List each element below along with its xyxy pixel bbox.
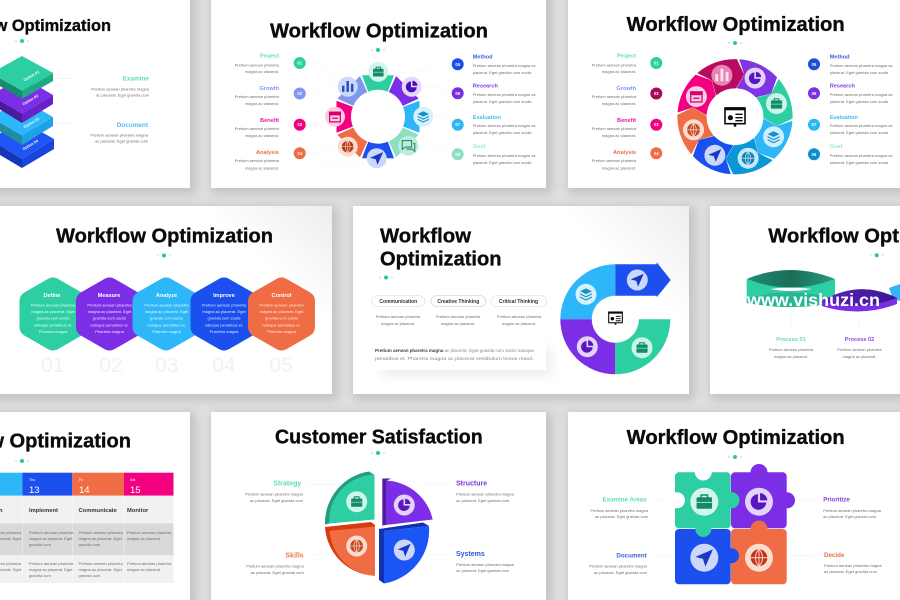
panel: segmented ring slide: [211, 0, 546, 188]
hexagon: Define: magna ac placerat. Eget: [31, 309, 76, 314]
title dots: [379, 276, 393, 280]
right number badges: [808, 58, 820, 160]
pie: strategy slice: [325, 472, 374, 524]
left labels: Pretium aenean pharetra: [592, 94, 637, 99]
left labels: magna ac placerat.: [602, 133, 636, 138]
text: Process 02: Pretium aenean pharetra: [837, 347, 882, 352]
right labels: placerat. Eget gravida cum sociis: [473, 99, 531, 104]
right labels: Pretium aenean pharetra magna ac: [830, 123, 893, 128]
text: Process 02: magna ac placerat.: [842, 354, 877, 359]
right number badges: 08: [812, 152, 817, 157]
right labels: placerat. Eget gravida cum sociis: [473, 130, 531, 135]
left labels: Pretium aenean pharetra: [592, 158, 637, 163]
hexagon: Measure: natoque penatibus et.: [90, 322, 129, 327]
right number badges: 08: [455, 152, 461, 157]
left labels: Analysis: [613, 150, 636, 156]
panel: hexagon steps slide: [0, 206, 332, 394]
hexagon: Control: gravida cum sociis: [265, 316, 298, 321]
right labels: Pretium aenean pharetra magna ac: [473, 63, 536, 68]
step numbers: 01: [41, 354, 64, 377]
plate labels: Option 04: [22, 139, 40, 151]
hexagon: Control: Control: [272, 293, 292, 299]
step numbers: [41, 354, 293, 377]
text: Skills: Pretium aenean pharetra magna: [246, 564, 304, 568]
left labels: magna ac placerat.: [602, 166, 636, 170]
pill: Critical Thinking: Critical Thinking: [499, 299, 538, 305]
hexagon: Define: natoque penatibus et.: [34, 322, 72, 327]
text: Strategy: Pretium aenean pharetra magna: [245, 492, 304, 496]
right labels: [473, 54, 536, 165]
title: Workflow Optimization: [627, 427, 845, 449]
left number badges: [294, 57, 306, 159]
left labels: Pretium aenean pharetra: [592, 62, 637, 68]
title dots: [728, 41, 742, 45]
note card: [372, 340, 552, 376]
hexagon: Improve: [200, 288, 248, 340]
hexagon: Control: [258, 288, 305, 340]
text: Document: ac placerat. Eget gravida cum: [594, 570, 648, 575]
table header: 14: [79, 485, 90, 496]
panel: 3D bands slide: [710, 206, 900, 394]
hexagon: Measure: gravida cum sociis: [93, 316, 126, 321]
title dots: [870, 253, 884, 257]
right number badges: 07: [455, 122, 461, 127]
table rows: magna ac placerat. Eget: [78, 536, 123, 541]
hexagon: Control: magna ac placerat. Eget: [260, 309, 304, 314]
pill: Communication: Communication: [379, 299, 417, 305]
right labels: Goal: [473, 144, 486, 150]
plate labels: Option 01: [23, 70, 40, 82]
text: Process 02: [837, 337, 882, 359]
text: Examine Areas: Pretium aenean pharetra magna: [590, 508, 649, 513]
text: Document: Pretium aenean pharetra magna: [589, 564, 648, 568]
table header: Fri: [79, 478, 83, 482]
right labels: placerat. Eget gravida cum sociis: [473, 160, 531, 165]
band: cyan: [889, 284, 900, 301]
table rows: Pretium aenean pharetra: [78, 530, 124, 535]
pie: skills slice: [325, 522, 375, 576]
right labels: placerat. Eget gravida cum sociis: [473, 70, 531, 75]
hexagon: Control: natoque penatibus et.: [262, 322, 301, 327]
table rows: Pretium aenean pharetra: [127, 561, 172, 566]
text: Document: Document: [616, 552, 647, 560]
right labels: Method: [830, 54, 850, 60]
hexagon: Analyze: Pretium aenean pharetra: [144, 302, 189, 308]
text: Systems: ac placerat. Eget gravida cum: [456, 568, 510, 573]
text: Structure: [456, 481, 515, 503]
table rows: Pretium aenean pharetra: [29, 530, 74, 535]
text: Skills: ac placerat. Eget gravida cum: [251, 570, 304, 575]
note card: Pretium aenean pharetra magna ac placerat. Eget gravida cum sociis natoque: [375, 348, 534, 353]
table rows: Implement: [29, 508, 58, 514]
hexagon: Measure: Pretium aenean pharetra: [87, 302, 132, 308]
hexagon: Analyze: gravida cum sociis: [150, 316, 183, 321]
connector lines: [306, 62, 451, 166]
left number badges: 04: [654, 151, 659, 156]
right labels: Method: [473, 54, 493, 60]
text: Structure: Pretium aenean pharetra magna: [456, 492, 515, 496]
right labels: Evaluation: [830, 115, 859, 121]
plate labels: Option 02: [22, 94, 39, 106]
table rows: gravida cum: [78, 542, 101, 547]
plate labels: Option 03: [23, 117, 40, 129]
table rows: gravida cum: [29, 542, 51, 547]
pie: systems slice: [379, 522, 429, 584]
text: Prioritize: Pretium aenean pharetra magna: [823, 508, 882, 513]
right labels: Pretium aenean pharetra magna ac: [473, 153, 536, 158]
text: Document: Pretium aenean pharetra magna: [90, 132, 149, 138]
panel: Customer Satisfaction slide: [211, 412, 546, 600]
text: Document: Document: [117, 122, 149, 129]
right number badges: 05: [455, 62, 461, 67]
hexagon: Define: [30, 288, 76, 340]
text: Strategy: ac placerat. Eget gravida cum: [250, 498, 304, 503]
hexagon: Measure: Pharetra magna: [95, 329, 125, 334]
text: Process 01: Pretium aenean pharetra: [769, 347, 814, 352]
text: Examine Areas: Examine Areas: [603, 496, 647, 504]
band: green: [747, 270, 835, 307]
hexagon: Improve: Improve: [213, 293, 235, 299]
title dots: [371, 451, 385, 455]
left labels: Project: [260, 54, 279, 60]
text: Document: [90, 122, 149, 144]
left labels: [235, 54, 280, 170]
pill: Communication: magna ac placerat.: [381, 321, 415, 326]
left labels: Pretium aenean pharetra: [592, 126, 637, 131]
text: Systems: Systems: [456, 551, 485, 558]
title: Optimization: [380, 249, 502, 271]
hexagon: Define: Define: [43, 293, 61, 299]
table rows: Pretium aenean pharetra: [127, 530, 172, 535]
table header: Thu: [29, 478, 35, 482]
left labels: Growth: [616, 86, 637, 92]
text: Prioritize: [823, 496, 882, 519]
right labels: [830, 54, 893, 165]
title dots: [15, 459, 29, 463]
title: Workflow Optimization: [270, 20, 488, 42]
watermark: www.vishuzi.cn: [746, 290, 880, 310]
puzzle icons: [690, 488, 773, 572]
title dots: [371, 48, 385, 52]
title: Workflow: [380, 226, 471, 248]
text: Strategy: [245, 481, 304, 503]
left labels: Pretium aenean pharetra: [235, 158, 280, 163]
text: Process 01: magna ac placerat.: [774, 354, 808, 359]
right labels: Goal: [830, 144, 843, 150]
text: Examine: Examine: [123, 76, 149, 82]
right number badges: 06: [455, 91, 461, 96]
table rows: magna ac placerat. Eget: [29, 536, 73, 541]
puzzle: blue piece: [675, 529, 739, 584]
left labels: Pretium aenean pharetra: [235, 94, 280, 99]
title: Customer Satisfaction: [275, 426, 483, 448]
C arrow chart: [560, 262, 671, 374]
left labels: Pretium aenean pharetra: [235, 62, 280, 68]
right labels: Pretium aenean pharetra magna ac: [830, 92, 893, 97]
left labels: magna ac placerat.: [245, 166, 279, 170]
left number badges: 01: [297, 60, 303, 66]
arrow ring icons: [683, 65, 787, 169]
pie: structure slice: [382, 478, 433, 526]
text: Systems: Pretium aenean pharetra magna: [456, 562, 515, 567]
hexagon: Define: Pharetra magna: [39, 329, 68, 334]
left number badges: 02: [654, 91, 659, 96]
panel: schedule table slide: [0, 412, 190, 600]
ring segments: [336, 75, 420, 158]
pill: Critical Thinking: magna ac placerat.: [502, 321, 536, 326]
right labels: Pretium aenean pharetra magna ac: [830, 63, 893, 68]
step numbers: 03: [155, 354, 178, 377]
hexagon: Analyze: [142, 288, 190, 340]
text: Examine Areas: [590, 496, 649, 519]
text: Process 01: [769, 337, 814, 359]
hexagon: Improve: magna ac placerat. Eget: [202, 309, 247, 314]
left labels: magna ac placerat.: [245, 69, 279, 74]
text: Decide: [824, 552, 882, 574]
text: Document: ac placerat. Eget gravida cum: [95, 138, 149, 144]
left number badges: [650, 57, 662, 159]
hexagon: Control: Pharetra magna: [267, 329, 297, 334]
hexagon: Improve: natoque penatibus et.: [205, 322, 243, 327]
table header: Sat: [130, 478, 135, 482]
plate labels: [22, 70, 40, 151]
right number badges: 06: [812, 91, 817, 96]
step numbers: 05: [269, 354, 293, 377]
text: Structure: Structure: [456, 481, 487, 488]
left labels: magna ac placerat.: [245, 101, 279, 106]
right labels: placerat. Eget gravida cum sociis: [830, 160, 888, 165]
table rows: Pretium aenean pharetra: [78, 561, 124, 566]
table rows: Communicate: [78, 508, 118, 514]
pill: Communication: Pretium aenean pharetra: [376, 314, 421, 319]
panel: arrow ring slide: [568, 0, 900, 188]
text: Prioritize: Prioritize: [823, 496, 850, 504]
text: Examine Areas: ac placerat. Eget gravida cum: [595, 514, 649, 519]
title: Workflow Optimization: [56, 226, 273, 248]
puzzle: green piece: [669, 464, 740, 537]
text: Decide: Decide: [824, 552, 845, 559]
connector lines: [54, 78, 73, 123]
text: Process 01: Process 01: [776, 337, 806, 343]
hexagon: Analyze: Pharetra magna: [152, 329, 182, 334]
right labels: Research: [830, 84, 855, 90]
pill: Creative Thinking: magna ac placerat.: [441, 321, 475, 326]
right labels: Pretium aenean pharetra magna ac: [473, 92, 536, 97]
table rows: magna ac placerat: [127, 536, 161, 541]
text: Prioritize: ac placerat. Eget gravida cum: [823, 514, 877, 519]
right labels: Pretium aenean pharetra magna ac: [473, 123, 536, 128]
pill: Creative Thinking: [431, 296, 486, 326]
title dots: [157, 254, 171, 258]
hexagon: Improve: Pharetra magna: [210, 329, 239, 334]
right labels: Pretium aenean pharetra magna ac: [830, 153, 893, 158]
puzzle: orange piece: [731, 520, 787, 584]
table header: [0, 473, 174, 496]
pill: Critical Thinking: Pretium aenean pharetra: [497, 314, 542, 319]
step numbers: 04: [212, 354, 236, 377]
left number badges: 03: [654, 122, 659, 127]
text: Examine: Pretium aenean pharetra magna: [91, 86, 150, 92]
title: [380, 226, 502, 271]
note card: penatibus et. Pharetra magna ac placerat vestibulum lectus mauri.: [375, 356, 534, 361]
left labels: magna ac placerat.: [602, 101, 636, 106]
left number badges: 01: [654, 60, 659, 66]
text: Skills: Skills: [285, 552, 304, 559]
table rows: magna ac placerat. Eget: [78, 567, 123, 572]
dashed connectors: [655, 500, 815, 556]
center presentation icon: [608, 311, 623, 325]
table header: 13: [29, 485, 40, 496]
left labels: magna ac placerat.: [602, 69, 636, 74]
left labels: Analysis: [256, 150, 279, 156]
right number badges: [452, 58, 464, 160]
right number badges: 07: [812, 122, 817, 127]
hexagon: Analyze: natoque penatibus et.: [147, 322, 186, 327]
hexagon: Analyze: magna ac placerat. Eget: [145, 309, 189, 314]
hexagon: Measure: magna ac placerat. Eget: [88, 309, 132, 314]
left number badges: 03: [297, 122, 303, 127]
title dots: [728, 455, 742, 459]
left labels: magna ac placerat.: [245, 133, 279, 138]
table rows: Monitor: [127, 508, 149, 514]
panel: puzzle slide: [568, 412, 900, 600]
title dots: [15, 39, 29, 43]
table rows: magna ac placerat: [127, 567, 161, 572]
text: Decide: ac placerat. Eget gravida cum: [824, 569, 878, 574]
left labels: Benefit: [260, 118, 279, 124]
hexagon: Improve: gravida cum sociis: [208, 316, 240, 321]
right labels: placerat. Eget gravida cum sociis: [830, 130, 888, 135]
left labels: [592, 54, 637, 170]
puzzle: purple piece: [731, 464, 795, 528]
text: Structure: ac placerat. Eget gravida cum: [456, 498, 510, 503]
pill: Communication: [372, 296, 425, 326]
pill: Critical Thinking: [491, 296, 547, 326]
table rows: gravida cum: [78, 573, 101, 578]
text: Systems: [456, 551, 515, 573]
left labels: Project: [617, 54, 636, 60]
pill: Creative Thinking: Creative Thinking: [437, 299, 479, 305]
hexagon: Measure: [86, 288, 133, 340]
right labels: placerat. Eget gravida cum sociis: [830, 70, 888, 75]
right number badges: 05: [812, 62, 817, 67]
isometric stack: [0, 56, 54, 168]
pill: Creative Thinking: Pretium aenean pharetra: [436, 314, 481, 319]
text: Examine: [91, 76, 150, 98]
left number badges: 02: [297, 91, 303, 96]
left labels: Growth: [259, 86, 280, 92]
table header: 15: [130, 485, 141, 496]
left number badges: 04: [297, 151, 303, 156]
left labels: Benefit: [617, 118, 636, 124]
left labels: Pretium aenean pharetra: [235, 126, 280, 131]
text: Skills: [246, 552, 304, 575]
table rows: [0, 496, 174, 583]
right labels: placerat. Eget gravida cum sociis: [830, 99, 888, 104]
arrow ring segments: [674, 56, 796, 177]
right labels: Research: [473, 84, 498, 90]
table rows: gravida cum: [29, 573, 51, 578]
hexagon: Improve: Pretium aenean pharetra: [202, 302, 247, 308]
panel: C-shaped arrow slide: [353, 206, 689, 394]
table rows: Pretium aenean pharetra: [29, 561, 74, 566]
text: Strategy: Strategy: [273, 481, 301, 488]
panel: isometric stack slide: [0, 0, 190, 188]
hexagon: Define: Pretium aenean pharetra: [31, 302, 76, 308]
table rows: magna ac placerat. Eget: [29, 567, 73, 572]
connector lines: [308, 484, 449, 555]
dotted leader lines: [791, 313, 859, 330]
text: Document: [589, 552, 648, 575]
step numbers: 02: [99, 354, 123, 377]
center presentation icon: [724, 107, 746, 127]
text: Examine: ac placerat. Eget gravida cum: [96, 92, 150, 98]
ring icons: [325, 62, 433, 168]
title: Workflow Optimization: [627, 14, 845, 36]
band: purple: [822, 289, 897, 312]
hexagon: Analyze: Analyze: [156, 293, 177, 299]
text: Decide: Pretium aenean pharetra magna: [824, 563, 882, 568]
hexagon: Define: gravida cum sociis: [37, 316, 69, 321]
hexagon: Control: Pretium aenean pharetra: [259, 302, 304, 308]
right labels: Evaluation: [473, 115, 502, 121]
hexagon: Measure: Measure: [98, 293, 120, 299]
C arrow icons: [576, 270, 652, 358]
text: Process 02: Process 02: [845, 337, 874, 343]
